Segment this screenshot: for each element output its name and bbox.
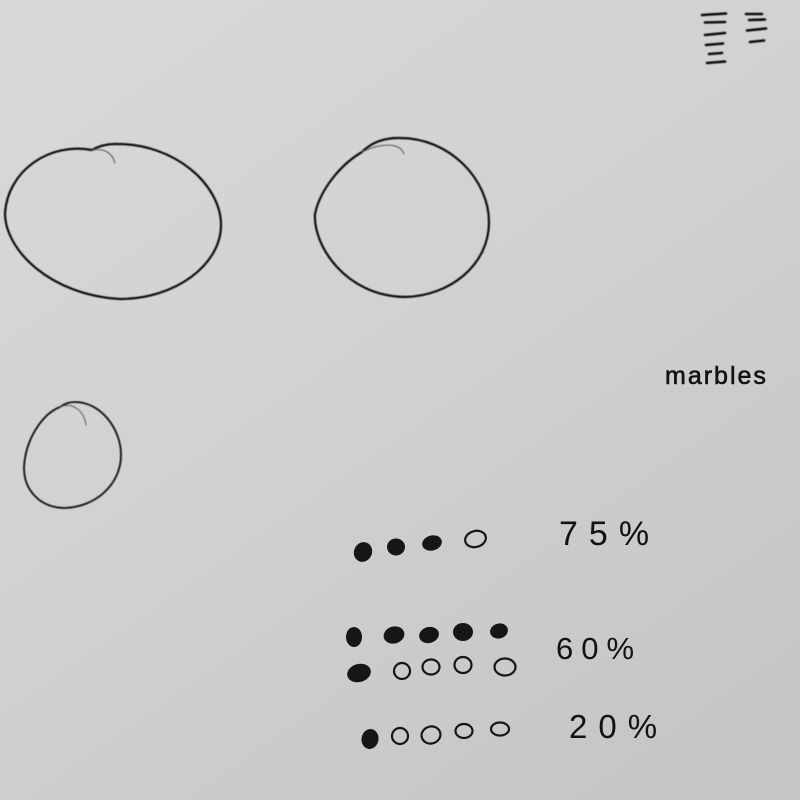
large wide circle sketch — [5, 144, 221, 299]
value: 60%: 60% — [556, 631, 642, 666]
value: 75%: 75% — [559, 515, 660, 553]
marble rows: 60% — [345, 621, 516, 685]
label: marbles: marbles — [665, 362, 768, 390]
medium circle sketch — [315, 138, 489, 297]
top-right tally lines — [702, 14, 766, 63]
marble row: 75% — [351, 529, 488, 565]
small circle sketch — [24, 402, 121, 508]
marble row: 20% — [360, 722, 509, 750]
value: 20%: 20% — [569, 708, 668, 745]
